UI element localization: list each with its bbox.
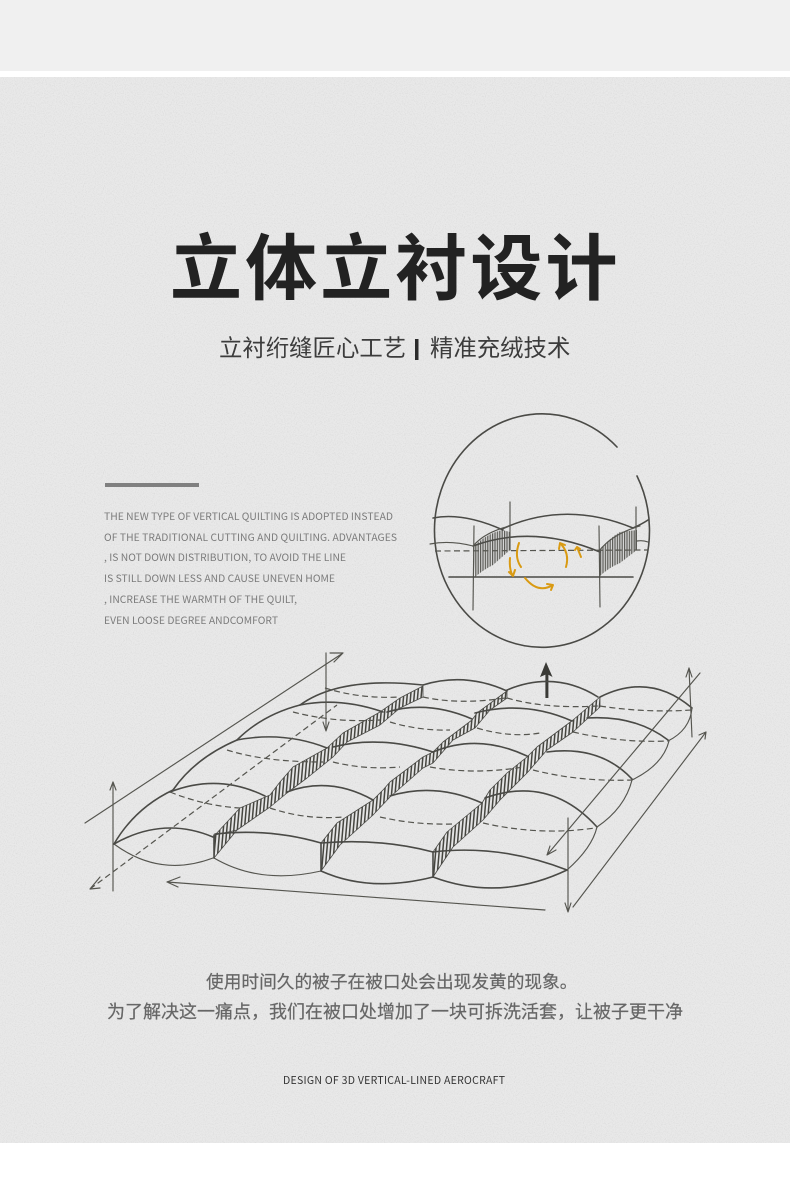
bold up arrow (540, 662, 552, 698)
caption text: 为了解决这一痛点，我们在被口处增加了一块可拆洗活套，让被子更干净 (107, 1002, 683, 1022)
orange airflow arrows (509, 543, 581, 590)
top band (0, 0, 790, 71)
english description: OF THE TRADITIONAL CUTTING AND QUILTING. ADVANTAGES (104, 529, 397, 544)
right edge (567, 708, 692, 870)
dimension arrows (85, 653, 706, 912)
puff curves (430, 514, 648, 552)
english description: IS STILL DOWN LESS AND CAUSE UNEVEN HOME (104, 570, 335, 585)
subtitle: 立衬绗缝匠心工艺 (219, 335, 406, 361)
title: 立体立衬设计 (170, 230, 621, 310)
subtitle (219, 335, 570, 361)
caption text (107, 972, 683, 1022)
hatched seams (214, 686, 600, 877)
footer english line: DESIGN OF 3D VERTICAL-LINED AEROCRAFT (283, 1073, 505, 1088)
front pillow row (114, 828, 567, 888)
english description: THE NEW TYPE OF VERTICAL QUILTING IS ADOPTED INSTEAD (104, 508, 393, 523)
magnified circle detail (430, 414, 649, 647)
caption text: 使用时间久的被子在被口处会出现发黄的现象。 (206, 972, 577, 992)
quilt illustration (85, 653, 706, 912)
back-row puff outlines (114, 680, 692, 844)
accent bar (105, 483, 199, 487)
english description (104, 508, 397, 627)
circle outline (434, 414, 649, 647)
english description: EVEN LOOSE DEGREE ANDCOMFORT (104, 612, 278, 627)
seam verticals (214, 835, 433, 877)
construction lines (435, 502, 648, 610)
english description: , INCREASE THE WARMTH OF THE QUILT, (104, 591, 297, 606)
dashed row lines (170, 688, 692, 831)
english description: , IS NOT DOWN DISTRIBUTION, TO AVOID THE LINE (104, 549, 346, 564)
subtitle: 精准充绒技术 (430, 335, 570, 361)
hatched seams in detail (473, 530, 637, 577)
